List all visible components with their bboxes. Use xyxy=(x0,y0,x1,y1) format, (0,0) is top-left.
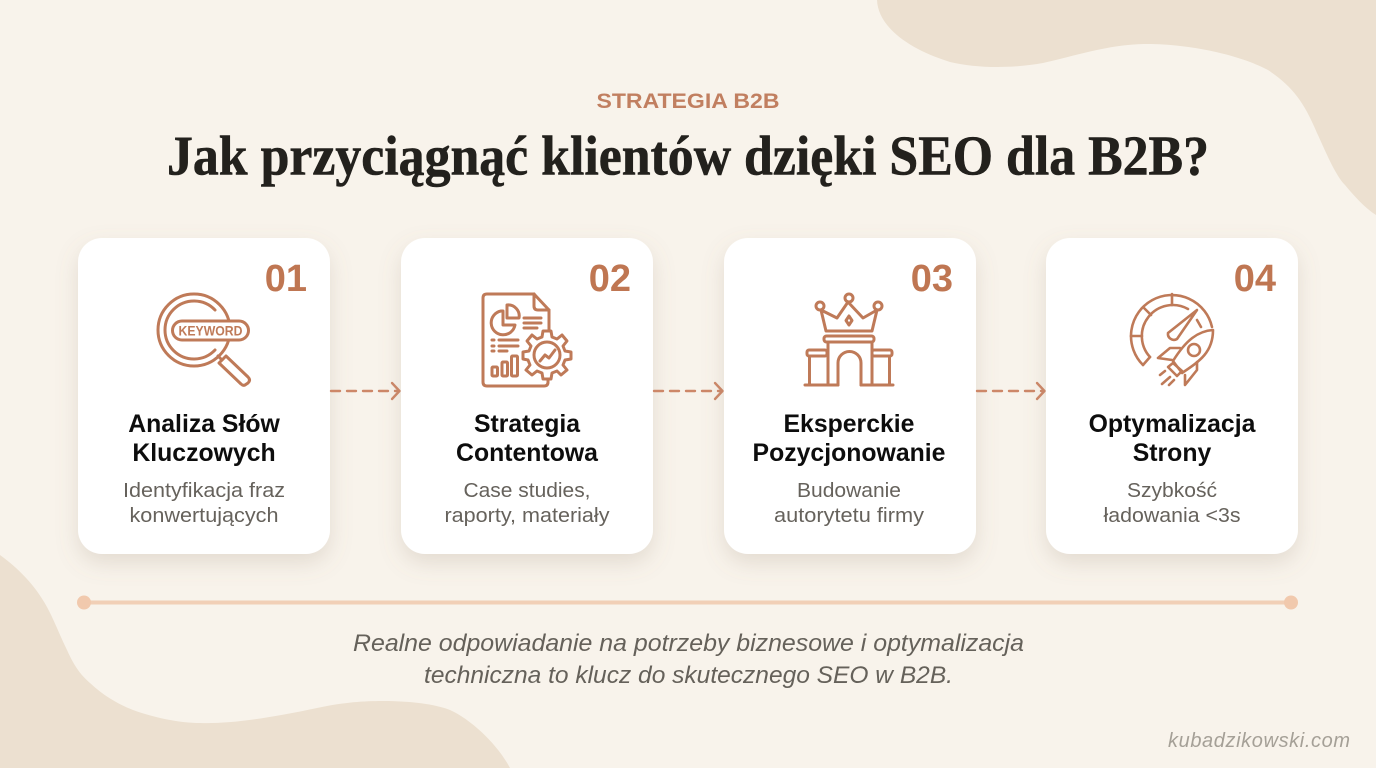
panel: step 04 xyxy=(1046,238,1298,554)
conclusion text xyxy=(353,630,1024,689)
icon: keyword magnifier xyxy=(158,294,250,385)
panel: step 02 xyxy=(401,238,653,554)
conclusion text: Realne odpowiadanie na potrzeby biznesowe i optymalizacja xyxy=(353,630,1024,657)
panel: step 03: autorytetu firmy xyxy=(774,504,925,527)
eyebrow label: STRATEGIA B2B xyxy=(596,89,780,113)
panel: step 01 xyxy=(78,238,330,554)
number 04: 04 xyxy=(1234,258,1276,300)
icon: report with gear xyxy=(483,294,571,386)
arrow 3 to 4 xyxy=(977,383,1044,399)
description: Case studies, xyxy=(464,479,590,502)
panel: step 01: konwertujących xyxy=(130,504,278,527)
background blob: top right xyxy=(877,0,1376,215)
panel: step 02: raporty, materiały xyxy=(444,504,610,527)
footer url: kubadzikowski.com xyxy=(1168,730,1350,752)
arrow 1 to 2 xyxy=(331,383,400,399)
conclusion text: techniczna to klucz do skutecznego SEO w B2B. xyxy=(424,662,953,689)
panel: step 01: Kluczowych xyxy=(132,440,276,467)
icon: crown on gate xyxy=(805,294,893,385)
panel: step 02: Contentowa xyxy=(456,440,598,467)
panel: step 04: ładowania <3s xyxy=(1104,504,1240,527)
number 03: 03 xyxy=(911,258,953,300)
icon: keyword magnifier: KEYWORD xyxy=(178,322,242,338)
description: Identyfikacja fraz xyxy=(123,479,285,502)
description: Szybkość xyxy=(1127,479,1217,502)
heading: Strategia xyxy=(474,411,580,438)
heading: Eksperckie xyxy=(784,411,914,438)
number 01: 01 xyxy=(265,258,307,300)
panel: step 04: Strony xyxy=(1133,440,1211,467)
description: Budowanie xyxy=(797,479,901,502)
timeline bar xyxy=(77,596,1298,610)
background blob: bottom left xyxy=(0,555,510,768)
number 02: 02 xyxy=(589,258,631,300)
arrow 2 to 3 xyxy=(654,383,722,399)
panel: step 03 xyxy=(724,238,976,554)
title: Jak przyciągnąć klientów dzięki SEO dla B2B? xyxy=(167,126,1209,188)
panel: step 03: Pozycjonowanie xyxy=(753,440,945,467)
heading: Analiza Słów xyxy=(128,411,280,438)
icon: speedometer and rocket xyxy=(1131,294,1213,385)
heading: Optymalizacja xyxy=(1089,411,1256,438)
